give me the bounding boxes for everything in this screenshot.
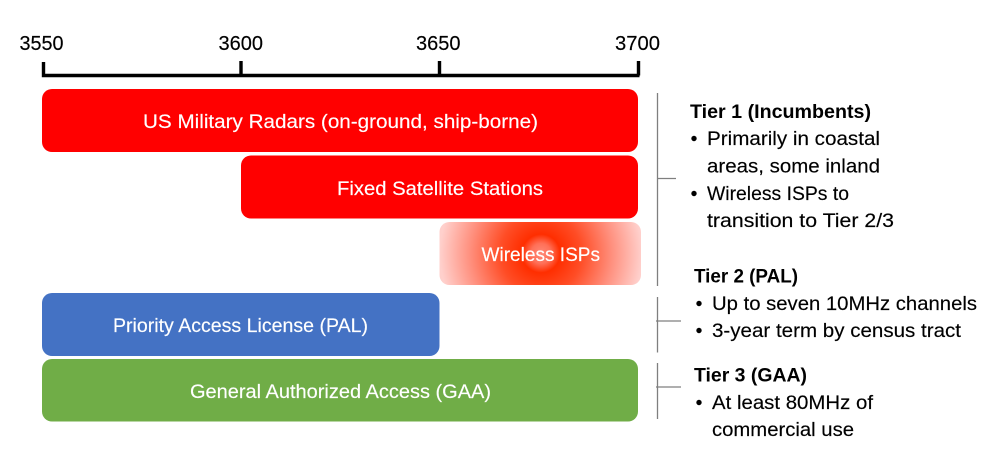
bracket: tier 1 (658, 93, 676, 286)
bar: Fixed Satellite Stations: Fixed Satellite Stations (337, 178, 543, 200)
heading: tier 3: Tier 3 (GAA) (694, 364, 807, 386)
axis labels: 3600 (218, 33, 263, 55)
bullet: commercial use: commercial use (712, 419, 854, 441)
bar: Wireless ISPs: Wireless ISPs (482, 244, 600, 266)
bullet: coastal areas (691, 128, 880, 178)
text block: tier 2 (694, 266, 977, 342)
axis labels: 3650 (416, 33, 460, 55)
bar: General Authorized Access (42, 359, 638, 422)
bullet: wireless ISPs transition: Wireless ISPs to (707, 183, 849, 205)
text block: tier 1 (690, 101, 894, 232)
bar: Priority Access License (42, 293, 440, 356)
bar: Wireless ISPs (440, 222, 641, 285)
bullet: wireless ISPs transition: transition to Tier 2/3 (707, 210, 894, 232)
bar: US Military Radars (42, 89, 638, 152)
bullet: coastal areas: areas, some inland (707, 156, 880, 178)
bullet: wireless ISPs transition (691, 183, 894, 232)
bracket: tier 3 (656, 363, 681, 419)
bullet: channels: Up to seven 10MHz channels (712, 293, 977, 315)
bullet: commercial use (696, 392, 874, 441)
axis labels: 3550 (20, 33, 64, 55)
bar: Fixed Satellite Stations (241, 156, 638, 218)
bar: General Authorized Access: General Authorized Access (GAA) (190, 381, 491, 403)
frequency axis (20, 33, 660, 76)
bracket: tier 2 (656, 297, 681, 352)
bar: Priority Access License: Priority Access License (PAL) (113, 315, 368, 337)
bullet: term: 3-year term by census tract (712, 320, 962, 342)
text block: tier 3 (694, 364, 874, 441)
axis labels (20, 33, 660, 55)
heading: tier 1: Tier 1 (Incumbents) (690, 101, 871, 123)
bullet: coastal areas: Primarily in coastal (707, 128, 880, 150)
axis line and ticks (44, 61, 640, 76)
bullet: commercial use: At least 80MHz of (712, 392, 874, 414)
heading: tier 2: Tier 2 (PAL) (694, 266, 798, 288)
bar: US Military Radars: US Military Radars (on-ground, ship-borne) (143, 111, 538, 133)
axis labels: 3700 (615, 33, 660, 55)
